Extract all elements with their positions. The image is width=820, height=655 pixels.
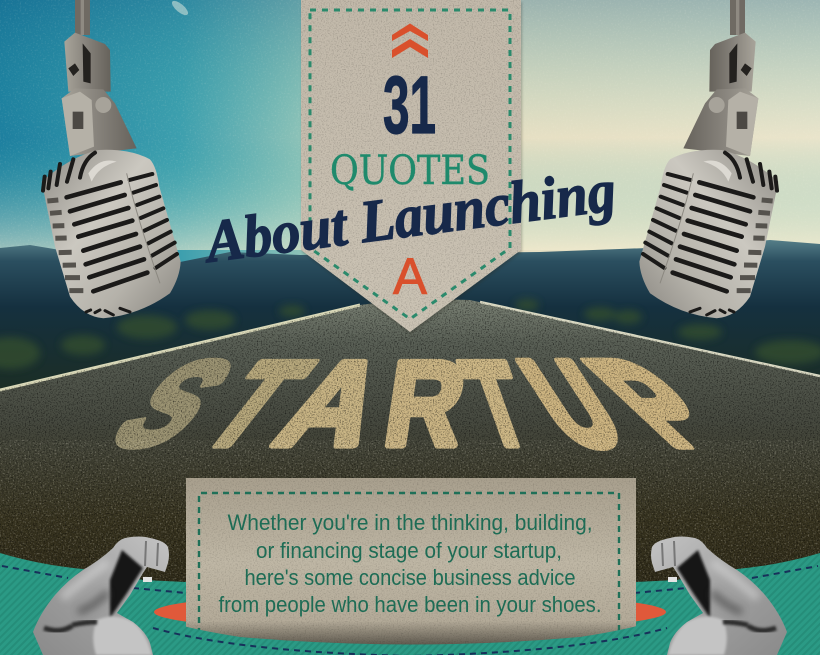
icon: double chevron [392,24,428,58]
number 31: 31 [383,60,436,151]
script title: About Launching: About Launching [199,157,619,275]
panel: intro text card [186,478,636,648]
intro text: Whether you're in the thinking, building, [228,510,592,535]
intro text: here's some concise business advice [244,565,576,590]
background: mountains and land [0,240,820,400]
road lettering: STARTUP: U [498,337,647,471]
intro text: from people who have been in your shoes. [218,592,602,617]
ribbon: front fold [153,615,667,655]
road lettering: STARTUP: S [81,338,265,471]
arm: left flexing [33,536,169,655]
banner: paper pennant [296,0,526,335]
road lettering: STARTUP: A [257,338,409,471]
microphone: right [639,0,778,318]
road lettering: STARTUP: T [174,336,337,471]
road lettering: STARTUP [81,336,759,471]
microphone: left [42,0,181,318]
arm: right flexing [651,536,787,655]
intro text: or financing stage of your startup, [256,538,562,563]
road grain texture [0,300,820,582]
word QUOTES: QUOTES [330,148,490,194]
road lettering: STARTUP: T [448,337,545,471]
road lettering: STARTUP: P [552,336,759,471]
intro text [218,510,602,617]
background: sky [0,0,820,320]
road [0,300,820,655]
letter A: A [393,248,427,305]
road lettering: STARTUP: R [377,337,473,471]
ribbon: back and orange inside [0,553,820,655]
